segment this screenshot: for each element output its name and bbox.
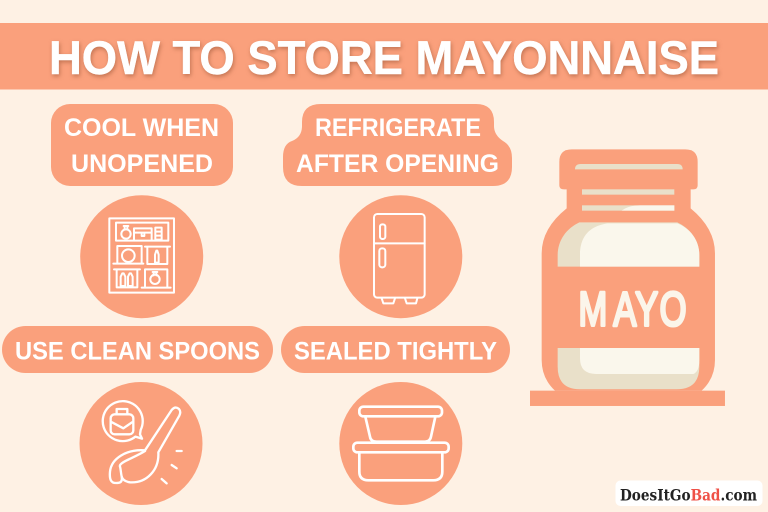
panel: refrigerate after opening bbox=[283, 104, 512, 186]
label text: AFTER OPENING bbox=[296, 151, 499, 178]
label text: USE CLEAN SPOONS bbox=[15, 338, 260, 366]
jar label text: M bbox=[579, 282, 607, 336]
logo: DoesItGoBad.com bbox=[616, 480, 762, 506]
lid slot bbox=[575, 164, 683, 169]
panel: cool when unopened bbox=[51, 104, 233, 186]
icon: pantry shelves bbox=[80, 195, 203, 318]
title: HOW TO STORE MAYONNAISE bbox=[49, 32, 719, 85]
icon: stacked containers bbox=[339, 382, 462, 505]
title banner bbox=[0, 23, 768, 90]
neck slots bbox=[582, 189, 674, 211]
label text: COOL WHEN bbox=[64, 115, 219, 142]
jar label text: Y bbox=[635, 282, 658, 336]
jar lid bbox=[559, 149, 698, 189]
jar body bbox=[542, 187, 715, 391]
jar label text: A bbox=[613, 282, 636, 336]
upper glass window bbox=[558, 222, 699, 267]
icon: spoon with jar bubble bbox=[80, 382, 202, 505]
label text: UNOPENED bbox=[71, 151, 213, 178]
panel: use clean spoons bbox=[2, 326, 273, 373]
illustration: mayo jar bbox=[530, 149, 725, 406]
icon: refrigerator bbox=[339, 195, 462, 318]
jar label text: O bbox=[660, 282, 687, 336]
logo text: DoesItGoBad.com bbox=[620, 486, 758, 504]
jar base bbox=[530, 391, 725, 406]
label text: SEALED TIGHTLY bbox=[294, 338, 498, 366]
lower glass window bbox=[558, 348, 699, 389]
label text bbox=[64, 115, 219, 178]
label text bbox=[296, 115, 499, 178]
panel: sealed tightly bbox=[281, 326, 510, 373]
label text: REFRIGERATE bbox=[315, 115, 481, 142]
